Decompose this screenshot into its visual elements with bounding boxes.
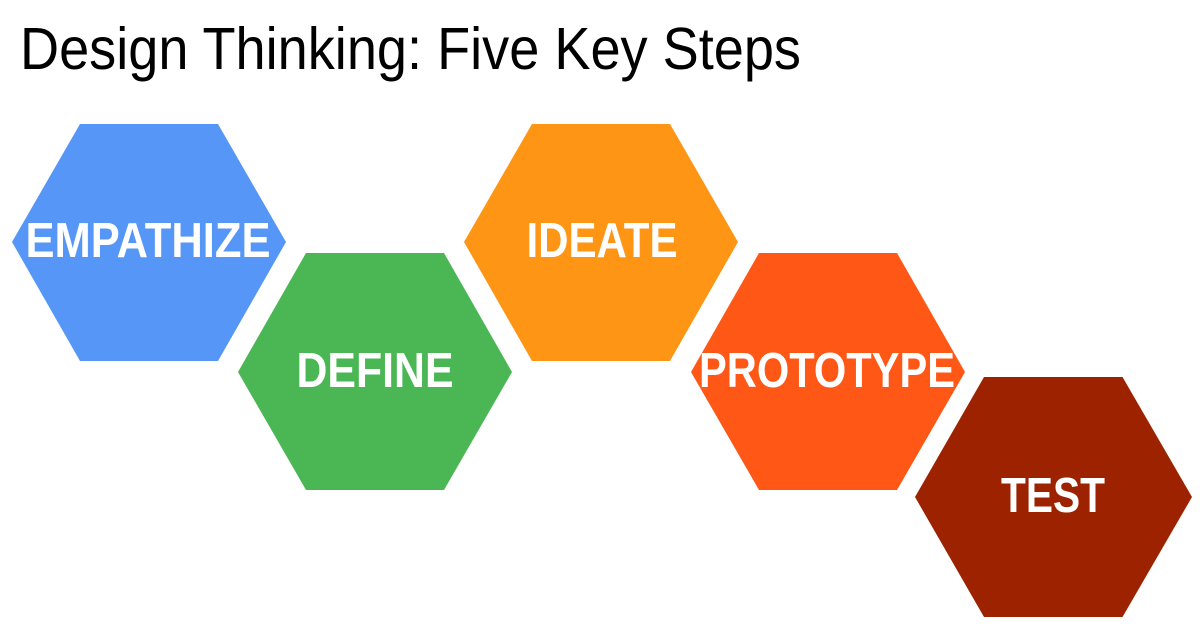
hexagon: ideate — [464, 124, 738, 361]
hexagon: prototype — [691, 253, 965, 490]
hexagon: empathize: EMPATHIZE — [26, 214, 270, 268]
hexagon: ideate: IDEATE — [526, 214, 678, 268]
hexagon: define — [238, 253, 512, 490]
hexagon: test: TEST — [1001, 469, 1105, 523]
hexagon: define: DEFINE — [296, 344, 454, 398]
hexagon: empathize — [12, 124, 286, 361]
hexagon: prototype: PROTOTYPE — [699, 344, 955, 398]
title: Design Thinking: Five Key Steps — [20, 16, 801, 82]
hexagon: test — [915, 377, 1192, 617]
